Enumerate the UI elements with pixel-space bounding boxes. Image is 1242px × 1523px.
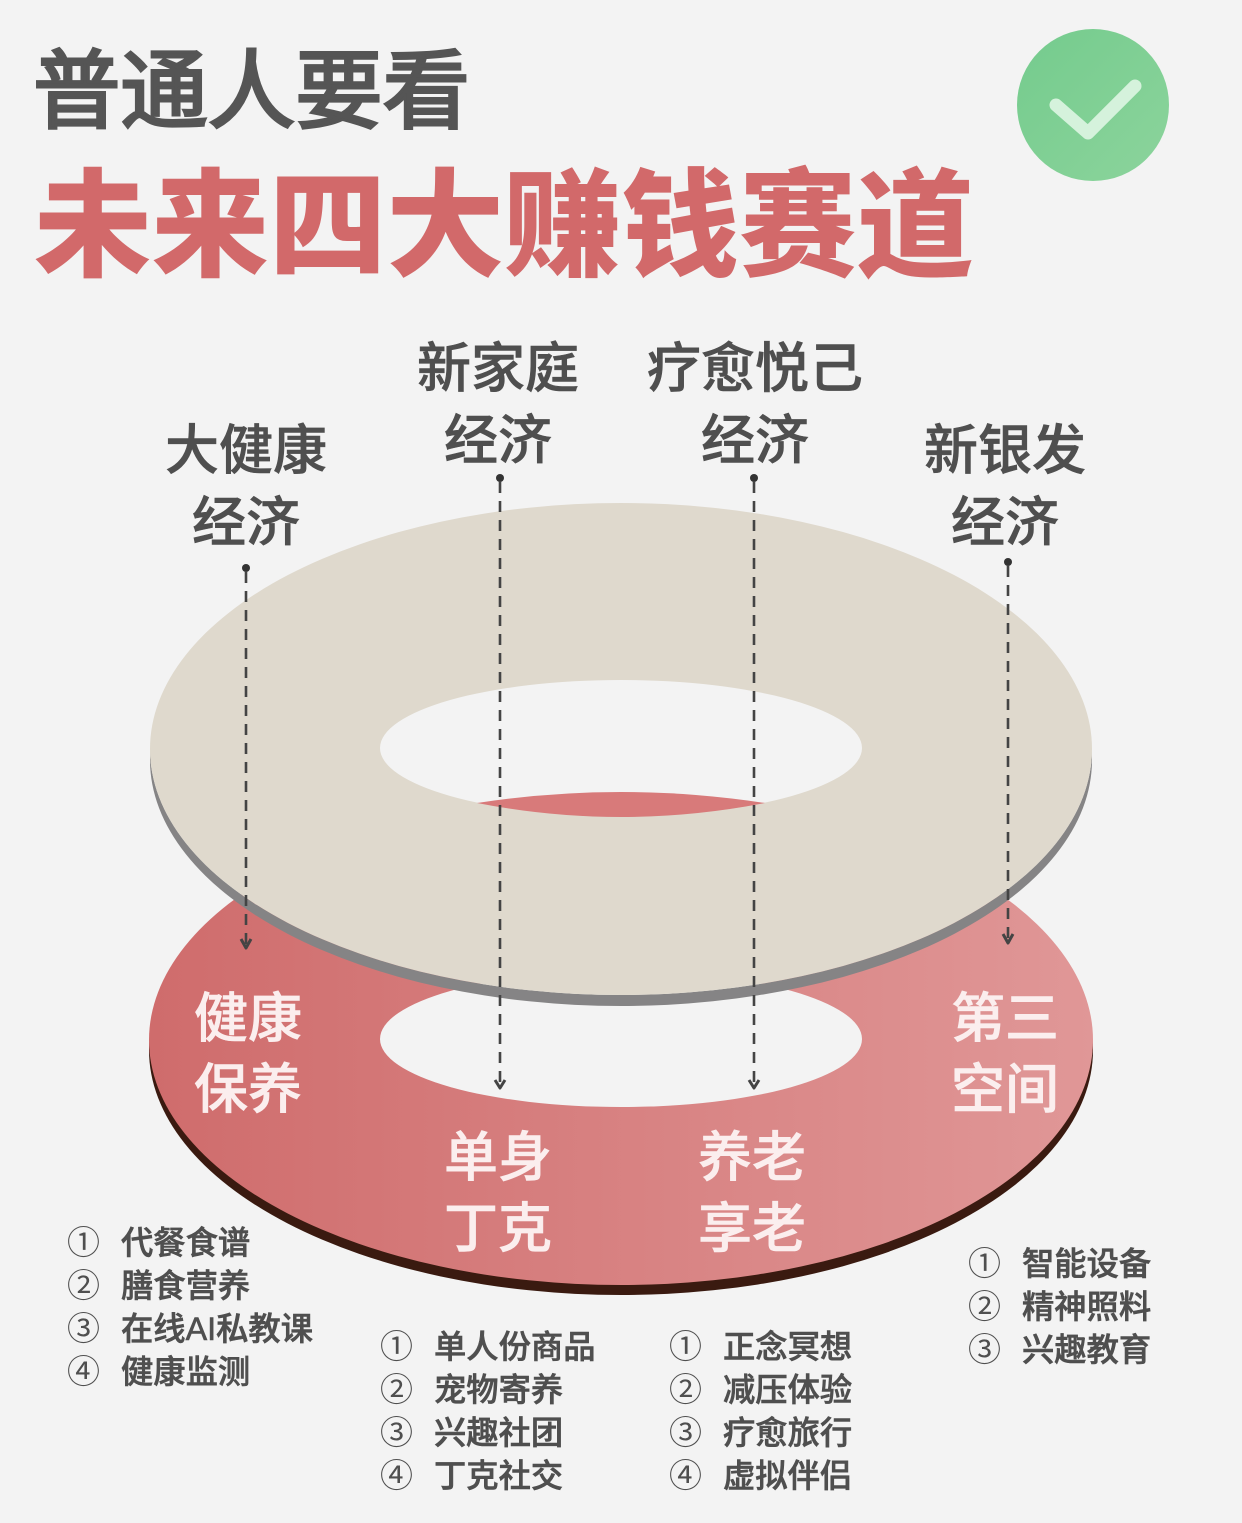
arrow: 疗愈悦己 [749, 474, 759, 1088]
disc label: 养老享老 [698, 1128, 806, 1259]
label: 新银发经济: 经济 [951, 493, 1059, 553]
list: 养老享老: 正念冥想 [723, 1329, 852, 1365]
list: 健康保养: 在线AI私教课 [121, 1311, 313, 1347]
disc label: 健康保养: 健康 [194, 989, 302, 1049]
disc label: 养老享老: 享老 [698, 1199, 806, 1259]
list: 养老享老 [669, 1328, 852, 1494]
label: 疗愈悦己经济: 经济 [701, 411, 809, 471]
icon: green check [1017, 29, 1169, 181]
list: 养老享老: ② [669, 1371, 702, 1408]
list: 单身丁克: 单人份商品 [434, 1329, 596, 1365]
label: 大健康经济 [165, 421, 327, 553]
list: 第三空间: ② [968, 1288, 1001, 1325]
list: 养老享老: ③ [669, 1414, 702, 1451]
list: 单身丁克: 丁克社交 [434, 1458, 563, 1494]
list: 健康保养: 健康监测 [121, 1354, 250, 1390]
list: 健康保养: ④ [67, 1353, 100, 1390]
list: 单身丁克: ④ [380, 1457, 413, 1494]
list: 养老享老: 减压体验 [723, 1372, 852, 1408]
disc label: 第三空间: 空间 [951, 1060, 1059, 1120]
disc label: 第三空间 [951, 989, 1059, 1120]
list: 第三空间: 智能设备 [1022, 1246, 1151, 1282]
disc label: 健康保养 [194, 989, 302, 1120]
list: 单身丁克 [380, 1328, 596, 1494]
label: 新家庭经济: 新家庭 [417, 339, 579, 399]
upper beige disc [150, 503, 1092, 1006]
label: 大健康经济: 大健康 [165, 421, 327, 481]
disc label: 健康保养: 保养 [194, 1060, 302, 1120]
label: 新银发经济 [924, 421, 1086, 553]
list: 第三空间: 精神照料 [1022, 1289, 1151, 1325]
label: 疗愈悦己经济 [647, 339, 863, 471]
lower red disc [149, 795, 1093, 1295]
label: 大健康经济: 经济 [192, 493, 300, 553]
disc label: 单身丁克 [444, 1128, 552, 1259]
list: 单身丁克: ③ [380, 1414, 413, 1451]
disc label: 单身丁克: 单身 [444, 1128, 552, 1188]
list: 第三空间: ① [968, 1245, 1001, 1282]
disc label: 单身丁克: 丁克 [444, 1199, 552, 1259]
list: 健康保养 [67, 1224, 313, 1390]
list: 健康保养: 膳食营养 [121, 1268, 250, 1304]
list: 健康保养: ③ [67, 1310, 100, 1347]
list: 第三空间: ③ [968, 1331, 1001, 1368]
list: 养老享老: ① [669, 1328, 702, 1365]
list: 养老享老: 疗愈旅行 [723, 1415, 852, 1451]
list: 健康保养: ① [67, 1224, 100, 1261]
label: 疗愈悦己经济: 疗愈悦己 [647, 339, 863, 399]
disc label: 第三空间: 第三 [951, 989, 1059, 1049]
label: 新家庭经济: 经济 [444, 411, 552, 471]
arrow: 大健康 [241, 564, 251, 948]
title line 2: 未来四大赚钱赛道 [34, 161, 974, 292]
label: 新银发经济: 新银发 [924, 421, 1086, 481]
list: 单身丁克: 兴趣社团 [434, 1415, 563, 1451]
list: 单身丁克: ② [380, 1371, 413, 1408]
list: 单身丁克: 宠物寄养 [434, 1372, 563, 1408]
list: 单身丁克: ① [380, 1328, 413, 1365]
list: 养老享老: ④ [669, 1457, 702, 1494]
list: 养老享老: 虚拟伴侣 [723, 1458, 852, 1494]
arrow: 新银发 [1003, 558, 1013, 943]
list: 健康保养: 代餐食谱 [121, 1225, 250, 1261]
disc label: 养老享老: 养老 [698, 1128, 806, 1188]
list: 健康保养: ② [67, 1267, 100, 1304]
arrow: 新家庭 [495, 474, 505, 1088]
list: 第三空间 [968, 1245, 1151, 1368]
title line 1: 普通人要看 [33, 44, 470, 140]
label: 新家庭经济 [417, 339, 579, 471]
list: 第三空间: 兴趣教育 [1022, 1332, 1151, 1368]
